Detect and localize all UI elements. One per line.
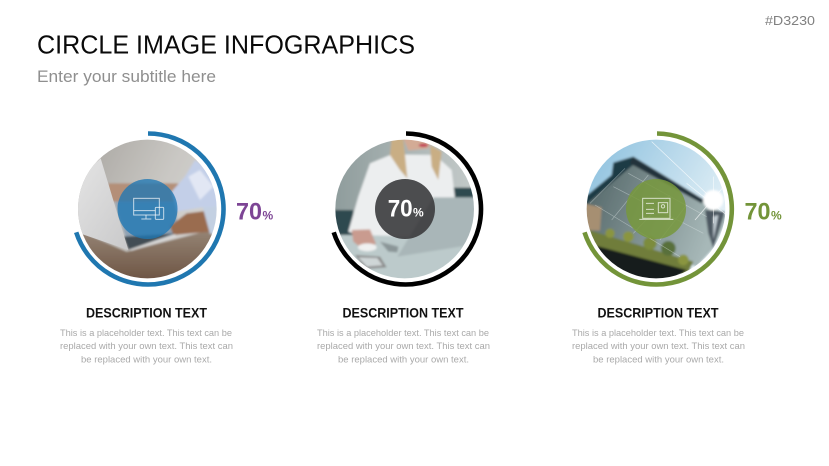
heading: DESCRIPTION TEXT <box>598 304 719 320</box>
description text <box>317 328 490 365</box>
description text: This is a placeholder text. This text can be <box>572 328 744 338</box>
photo: glass building <box>586 140 726 278</box>
percentage: purple: % <box>262 208 274 222</box>
icon badge: laptop profile <box>626 179 686 239</box>
percentage: green: % <box>771 208 782 222</box>
heading: DESCRIPTION TEXT <box>342 304 464 320</box>
percentage: purple: 70 <box>236 198 262 225</box>
description text <box>572 328 745 365</box>
icon badge: devices <box>118 179 178 239</box>
panel: left circle <box>60 134 274 365</box>
percentage: green: 70 <box>744 198 770 225</box>
progress ring: blue <box>76 134 224 284</box>
panel: middle circle <box>317 134 490 365</box>
description text: This is a placeholder text. This text can be <box>60 328 232 338</box>
description text: replaced with your own text. This text can <box>572 341 745 351</box>
percentage badge: % <box>413 206 424 220</box>
description text: be replaced with your own text. <box>81 355 212 365</box>
panel: right circle <box>572 134 782 365</box>
description text <box>60 328 233 365</box>
photo: laptop typing <box>78 140 217 278</box>
progress ring: green <box>584 134 732 284</box>
description text: replaced with your own text. This text can <box>317 341 490 351</box>
title: CIRCLE IMAGE INFOGRAPHICS <box>37 30 415 60</box>
progress ring: black <box>334 134 481 284</box>
description text: This is a placeholder text. This text can be <box>317 328 489 338</box>
document code: #D3230 <box>765 13 815 28</box>
photo: woman at laptop <box>335 140 474 278</box>
description text: be replaced with your own text. <box>338 355 469 365</box>
description text: be replaced with your own text. <box>593 355 724 365</box>
heading: DESCRIPTION TEXT <box>86 304 207 320</box>
description text: replaced with your own text. This text can <box>60 341 233 351</box>
subtitle: Enter your subtitle here <box>37 67 216 86</box>
percentage badge: 70 <box>388 196 413 223</box>
percentage badge <box>375 179 435 239</box>
